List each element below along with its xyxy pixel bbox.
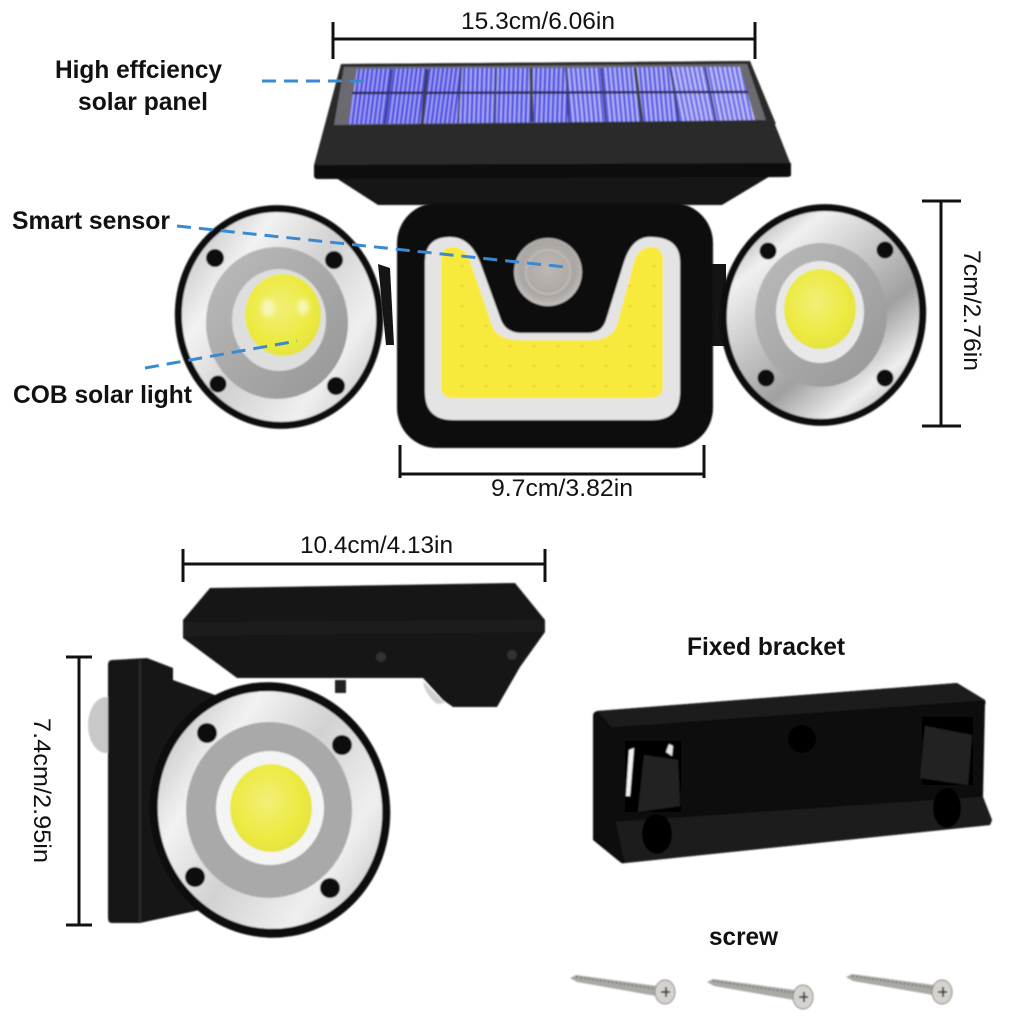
side view of unit (88, 583, 545, 957)
dimension: panel width 15.3cm: 15.3cm/6.06in (461, 8, 615, 35)
center light body (397, 203, 713, 448)
COB yellow panel (441, 247, 663, 398)
label: smart sensor: Smart sensor (12, 207, 170, 235)
side panel housing (183, 583, 545, 707)
side lamp (130, 663, 410, 957)
left lamp bracket (378, 264, 394, 345)
dimension: side width 10.4cm: 10.4cm/4.13in (300, 532, 453, 559)
right lamp bracket (708, 264, 726, 346)
dimension: body width 9.7cm: 9.7cm/3.82in (491, 475, 633, 502)
screw holes (185, 723, 352, 898)
U-shaped light frame (425, 237, 680, 420)
dimension: side width 10.4cm (183, 532, 545, 582)
label: high efficiency solar panel (55, 56, 222, 116)
label: screw: screw (709, 923, 779, 951)
dimension: panel width 15.3cm (333, 8, 755, 59)
screw holes (758, 242, 894, 386)
side body (108, 658, 215, 923)
solar cells (348, 67, 755, 124)
screw 1 (570, 975, 675, 1004)
screw 2 (707, 979, 813, 1009)
dimension: body width 9.7cm (400, 445, 704, 502)
fixed bracket (593, 683, 992, 863)
lens (784, 269, 856, 349)
lens (245, 274, 321, 356)
dimension: side height 7.4cm (28, 657, 92, 925)
screw holes (206, 249, 345, 395)
dimension: height 7cm: 7cm/2.76in (958, 250, 985, 371)
right clip (920, 717, 973, 785)
screw 3 (846, 974, 952, 1004)
left clip (625, 741, 681, 812)
solar panel (314, 61, 791, 205)
dimension: height 7cm (922, 201, 985, 426)
right lamp (706, 191, 940, 439)
dimension: side height 7.4cm: 7.4cm/2.95in (28, 718, 55, 863)
label: fixed bracket: Fixed bracket (687, 633, 846, 661)
PIR sensor (514, 238, 582, 306)
PIR dome (88, 697, 124, 753)
callout lines (145, 81, 565, 368)
label: COB solar light: COB solar light (13, 381, 193, 409)
lens highlights (261, 299, 309, 317)
left lamp (160, 192, 398, 442)
label: high efficiency solar panel: High effciency (55, 56, 222, 84)
label: high efficiency solar panel: solar panel (78, 88, 208, 116)
lens (230, 764, 312, 852)
